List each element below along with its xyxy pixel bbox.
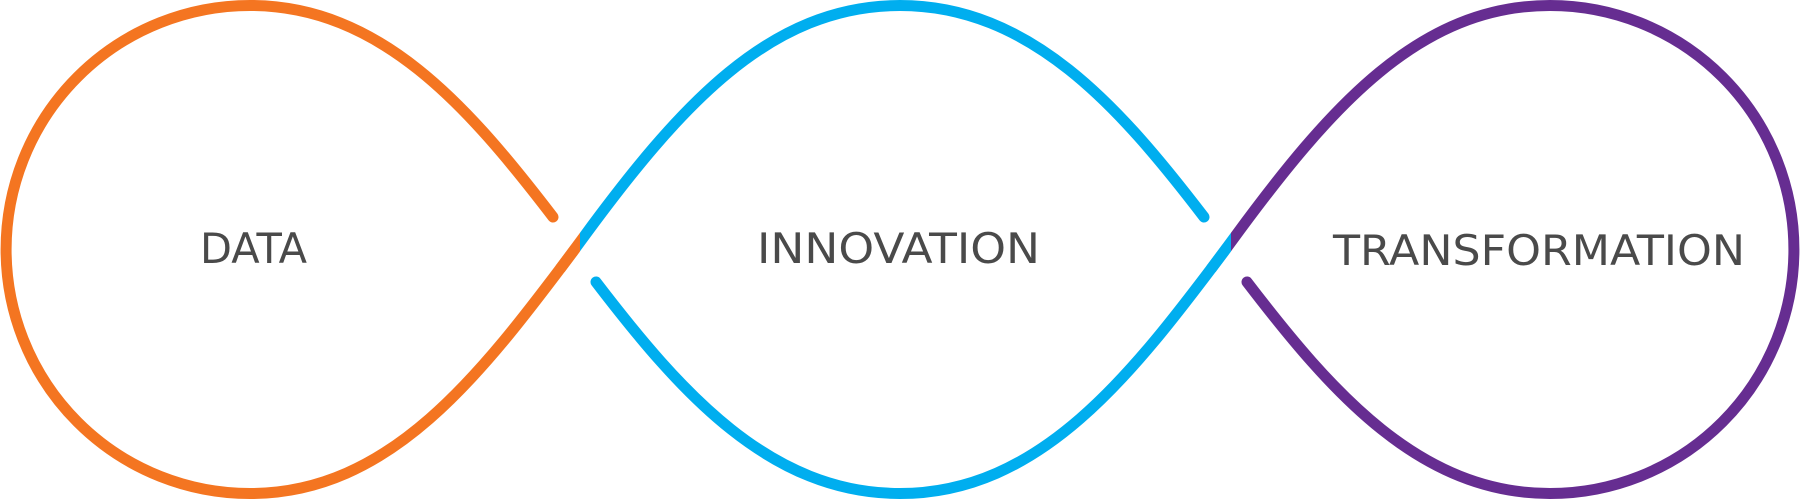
label: transformation: TRANSFORMATION (1332, 226, 1745, 275)
purple loop: transformation (1211, 6, 1794, 494)
label: data: DATA (200, 224, 307, 273)
label: innovation: INNOVATION (757, 224, 1040, 273)
orange loop: data (6, 6, 600, 494)
blue loop: innovation (560, 6, 1251, 494)
